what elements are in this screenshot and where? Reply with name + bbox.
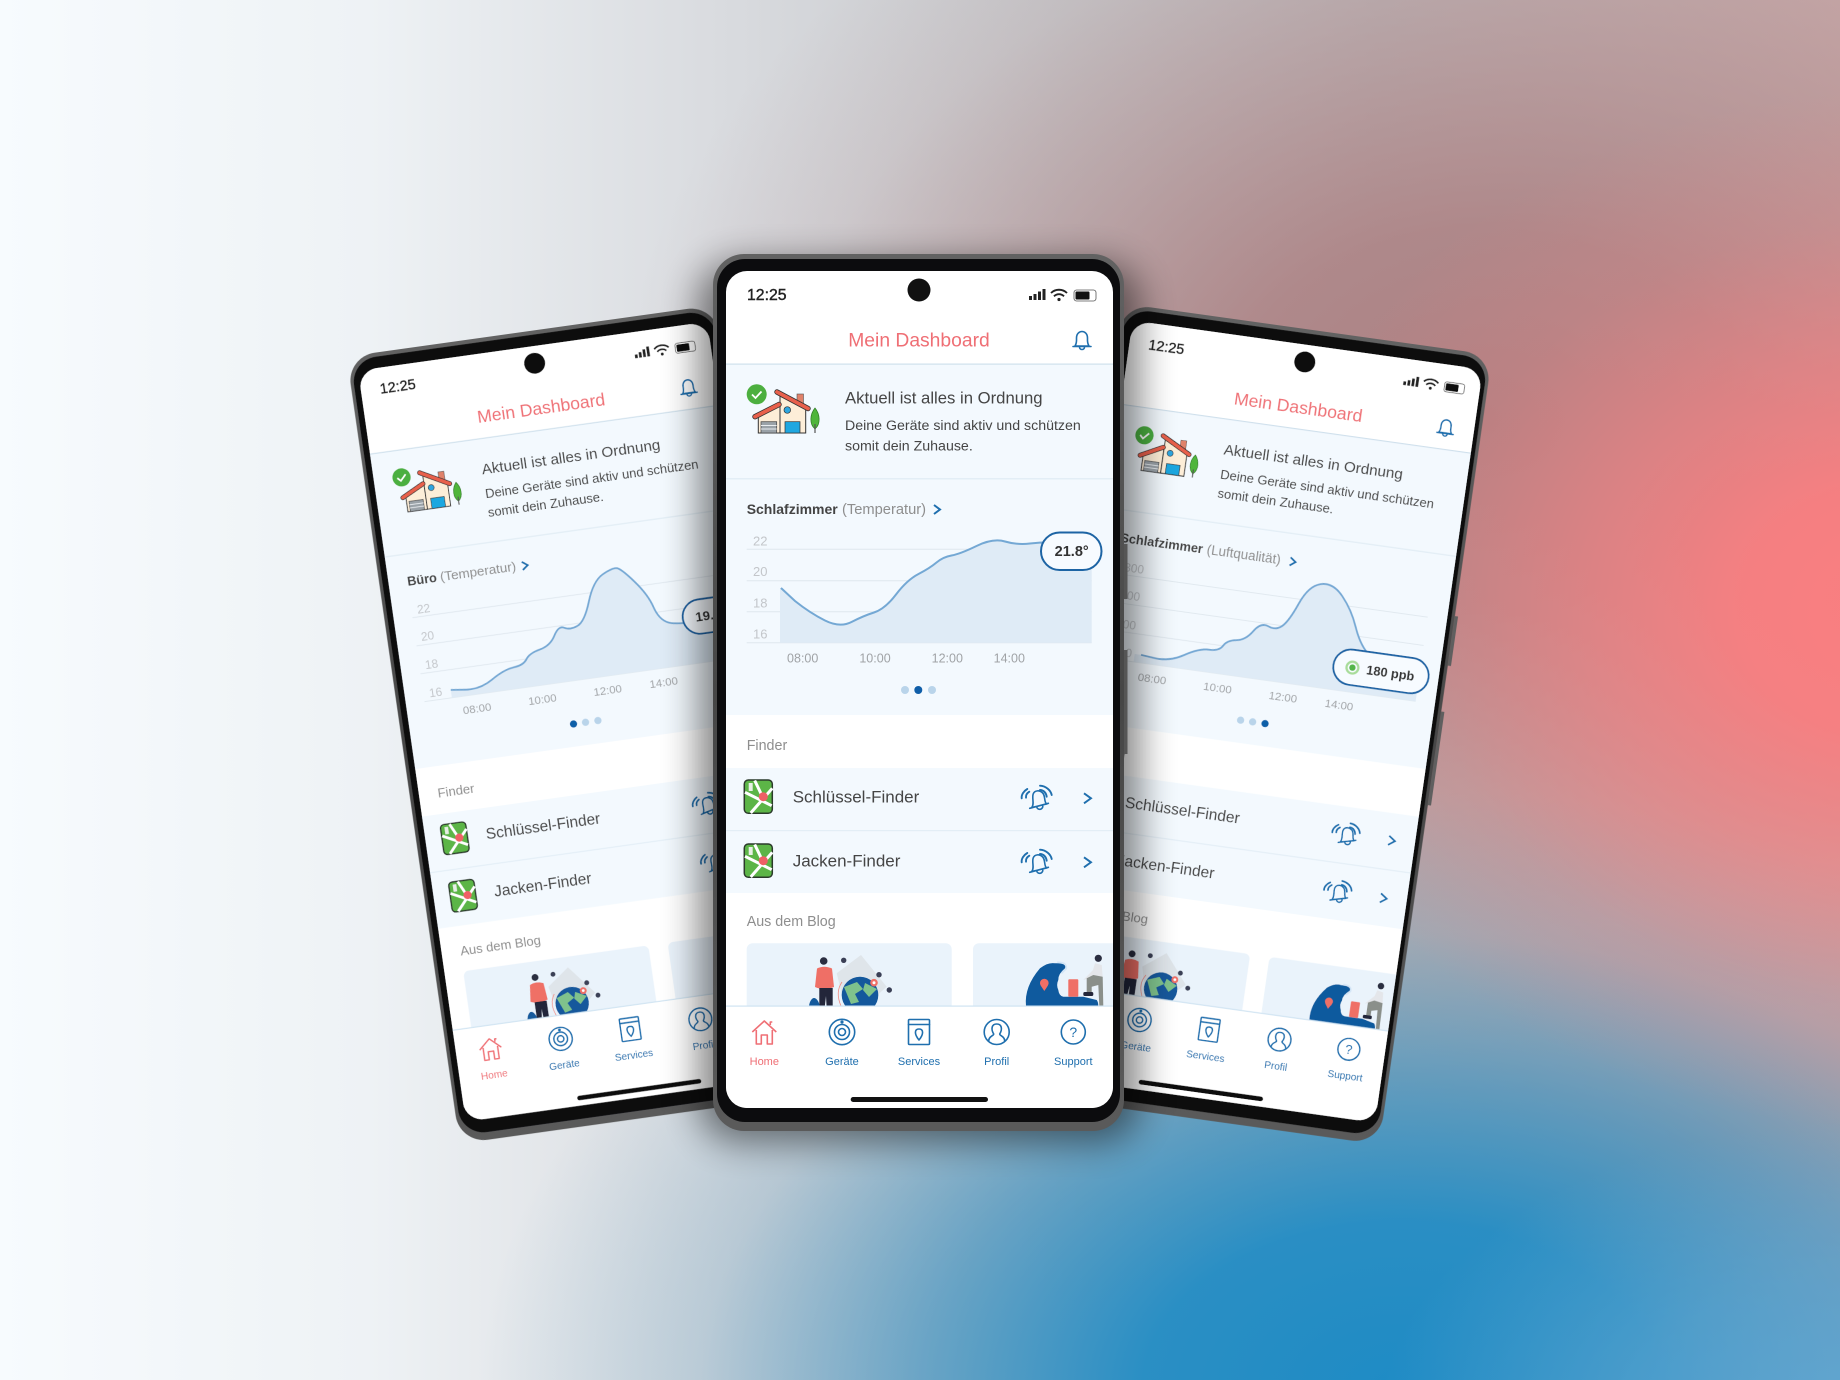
nav item: Services: Services — [614, 1048, 654, 1064]
line chart — [1100, 555, 1440, 724]
line chart: 12:00 — [1268, 690, 1298, 706]
line chart: 14:00 — [1324, 698, 1354, 714]
icon: house with check — [747, 384, 819, 433]
header title: Mein Dashboard — [848, 331, 990, 352]
line chart: 10:00 — [1202, 681, 1232, 697]
finder section: Finder — [1089, 742, 1129, 762]
panel: status — [726, 364, 1113, 478]
value pill: 180 ppb — [1365, 663, 1416, 684]
nav item: Home — [479, 1038, 508, 1080]
line chart: 16 — [428, 684, 444, 700]
status text: Aktuell ist alles in Ordnung — [845, 388, 1043, 407]
line chart: 300 — [1123, 561, 1145, 577]
nav item: Home — [1051, 998, 1084, 1045]
line chart: 16 — [753, 627, 767, 642]
line chart: 20 — [753, 564, 767, 579]
header title: Mein Dashboard — [476, 389, 606, 427]
status text: Deine Geräte sind aktiv und schützen — [484, 457, 699, 501]
nav item: Services: Services — [1185, 1049, 1225, 1065]
blog section — [460, 936, 713, 1027]
status bar: 12:25 — [747, 287, 787, 304]
nav item: Support — [751, 996, 792, 1045]
line chart: 14:00 — [994, 652, 1025, 666]
status text: Aktuell ist alles in Ordnung — [481, 436, 661, 478]
panel: chart — [384, 510, 713, 769]
nav item: Home — [750, 1021, 779, 1068]
status text: somit dein Zuhause. — [845, 439, 973, 455]
line chart: 14:00 — [649, 675, 679, 691]
left phone frame — [347, 305, 828, 1144]
line chart: 08:00 — [1137, 672, 1167, 688]
chart heading: Schlafzimmer — [747, 501, 838, 517]
value pill — [1041, 532, 1102, 570]
blog section: Aus dem Blog — [747, 914, 836, 930]
bottom navigation — [1025, 981, 1388, 1123]
line chart: 12:00 — [932, 652, 963, 666]
blog section — [747, 914, 1133, 1023]
bottom navigation — [726, 1006, 1113, 1108]
nav item: Services — [615, 1016, 654, 1061]
finder section — [1052, 740, 1423, 929]
finder row: Jacken — [744, 844, 1091, 877]
line chart: 18 — [424, 657, 440, 672]
line chart — [412, 567, 713, 714]
line chart: 08:00 — [462, 702, 492, 717]
carousel dots — [1236, 716, 1269, 728]
icon: house with check — [392, 468, 462, 513]
phone mockups — [350, 238, 1489, 1166]
blog section: Aus dem Blog — [1067, 901, 1149, 927]
left phone screen — [360, 324, 713, 1120]
carousel dots — [901, 686, 936, 694]
status text: somit dein Zuhause. — [487, 489, 604, 520]
status text: Aktuell ist alles in Ordnung — [1223, 442, 1404, 484]
finder row: Jacken — [448, 854, 713, 913]
line chart: 10:00 — [528, 692, 557, 708]
finder row: Schlüssel: Schlüssel-Finder — [485, 810, 601, 843]
nav item: Services — [898, 1020, 941, 1068]
line chart: 22 — [416, 601, 431, 617]
nav item: Home: Home — [480, 1068, 509, 1083]
status text — [482, 442, 698, 517]
finder row: Schlüssel — [744, 780, 1091, 813]
blog card 2 — [973, 943, 1133, 1023]
blog card 1 — [1054, 928, 1250, 1026]
icon: bell — [1073, 332, 1091, 350]
nav item: Services — [1185, 1016, 1230, 1065]
center phone shadow — [698, 262, 1140, 1142]
nav item: Support: Support — [755, 1029, 792, 1045]
finder row: Schlüssel: Schlüssel-Finder — [793, 788, 920, 807]
home indicator — [851, 1097, 988, 1102]
blog card 2 — [668, 936, 713, 998]
value pill: 19.2° — [694, 606, 727, 625]
blog section — [1054, 901, 1418, 1049]
center phone screen — [726, 271, 1133, 1108]
blog card 1 — [747, 943, 952, 1023]
status bar — [1148, 340, 1466, 395]
header title: Mein Dashboard — [1233, 388, 1364, 426]
blog card 2 — [1259, 957, 1414, 1049]
phone: center, Schlafzimmer temperature — [713, 254, 1133, 1131]
home indicator — [1138, 1080, 1263, 1101]
icon: bell — [679, 379, 698, 397]
phone: right, Schlafzimmer air quality — [1122, 307, 1489, 1141]
status text — [1218, 445, 1434, 514]
icon: house with check — [1135, 426, 1198, 478]
nav item: Home: Home — [1051, 1030, 1080, 1045]
line chart — [747, 532, 1102, 666]
status text: somit dein Zuhause. — [1217, 485, 1335, 516]
nav item: Profil: Profil — [692, 1039, 716, 1053]
nav item: Profil — [688, 1007, 713, 1050]
nav item: Home: Home — [750, 1056, 779, 1068]
chart heading: Büro — [406, 570, 438, 589]
carousel dots — [569, 716, 602, 728]
blog card 1 — [464, 946, 656, 1027]
nav item: Geräte: Geräte — [825, 1056, 859, 1068]
finder row: Jacken: Jacken-Finder — [793, 852, 901, 871]
finder section — [726, 738, 1113, 893]
phone: left, Büro temperature — [350, 308, 714, 1140]
blog section: Aus dem Blog — [459, 933, 542, 959]
panel: chart — [726, 478, 1113, 715]
panel: status — [370, 405, 734, 556]
nav item: Support — [1054, 1020, 1093, 1068]
chart heading — [747, 501, 940, 518]
bottom navigation — [452, 994, 713, 1120]
line chart: 22 — [753, 534, 767, 549]
chart heading: (Luftqualität) — [1206, 542, 1282, 567]
panel: status — [1106, 404, 1471, 556]
nav item: Geräte: Geräte — [549, 1058, 581, 1074]
right phone frame — [1010, 304, 1495, 1145]
nav item: Support — [1327, 1036, 1368, 1084]
icon: bell — [1436, 419, 1455, 437]
right phone screen — [1124, 322, 1481, 1121]
finder row: Jacken: Jacken-Finder — [493, 870, 593, 901]
line chart: 100 — [1115, 616, 1137, 633]
chart heading — [407, 561, 530, 586]
nav item: Profil: Profil — [984, 1056, 1009, 1068]
nav item: Profil — [984, 1020, 1009, 1068]
finder row: Jacken — [1071, 838, 1389, 912]
finder section: Finder — [437, 781, 476, 801]
nav item: Geräte: Geräte — [1120, 1040, 1152, 1055]
finder section — [422, 778, 713, 929]
value pill — [1331, 647, 1431, 696]
panel: chart — [1124, 510, 1456, 769]
line chart: 20 — [420, 628, 435, 644]
nav item: Support: ? — [1344, 1041, 1353, 1057]
center phone frame — [713, 254, 1128, 1131]
finder row: Jacken: Jacken-Finder — [1116, 852, 1215, 883]
nav item: Geräte — [825, 1019, 859, 1068]
finder row: Schlüssel — [1079, 781, 1397, 855]
status bar — [747, 278, 1096, 304]
status text — [845, 388, 1081, 455]
line chart: 12:00 — [593, 683, 623, 699]
nav item: Geräte — [548, 1026, 580, 1070]
chart heading — [1124, 533, 1298, 567]
line chart: 0 — [1124, 646, 1133, 661]
nav item: Services: Services — [898, 1056, 941, 1068]
nav item: Support: Support — [1054, 1056, 1093, 1068]
home indicator — [577, 1079, 702, 1101]
status text: Deine Geräte sind aktiv und schützen — [1219, 467, 1435, 511]
status bar — [380, 340, 696, 394]
finder section: Finder — [747, 738, 787, 754]
finder row: Schlüssel: Schlüssel-Finder — [1124, 795, 1241, 827]
chart heading: Schlafzimmer — [1120, 530, 1204, 556]
nav item: Profil — [1264, 1027, 1292, 1074]
value pill — [682, 596, 713, 635]
status bar: 12:25 — [379, 377, 417, 398]
line chart: 18 — [753, 596, 767, 611]
nav item: Support: ? — [765, 1002, 774, 1018]
status bar: 12:25 — [1147, 337, 1185, 358]
chart heading: (Temperatur) — [439, 559, 517, 584]
chart heading: (Temperatur) — [842, 502, 926, 518]
value pill: 21.8° — [1055, 544, 1089, 560]
nav item: Profil: Profil — [1264, 1060, 1288, 1074]
status text: Deine Geräte sind aktiv und schützen — [845, 418, 1081, 434]
line chart: 08:00 — [787, 652, 818, 666]
nav item: Support: ? — [1069, 1024, 1077, 1040]
nav item: Geräte — [1120, 1006, 1157, 1055]
line chart: 10:00 — [859, 652, 891, 666]
line chart: 200 — [1119, 588, 1141, 604]
finder row: Schlüssel — [440, 792, 713, 856]
nav item: Support: Support — [1327, 1069, 1363, 1084]
